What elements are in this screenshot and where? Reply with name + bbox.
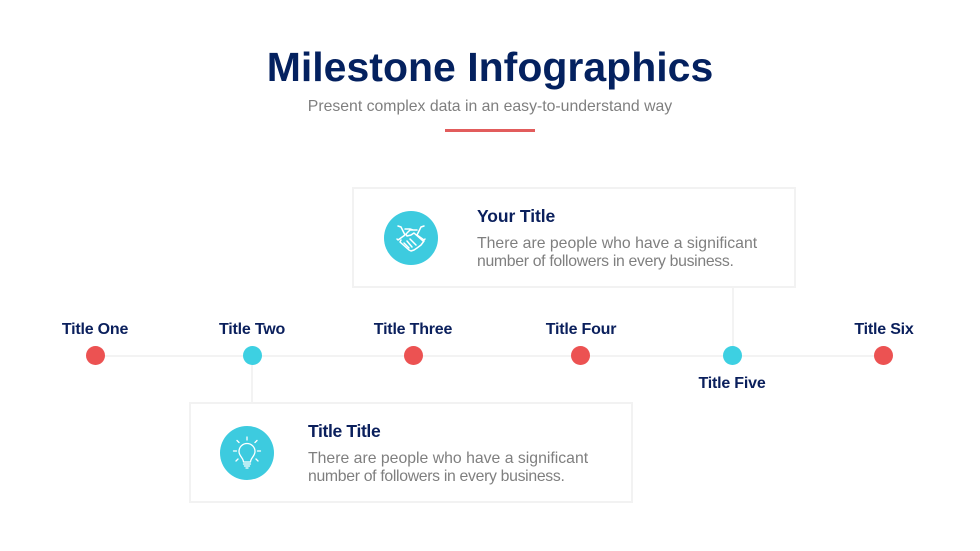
subtitle: Present complex data in an easy-to-understand way [308, 98, 672, 115]
milestone dot: Title Six [874, 346, 893, 365]
card body text: There are people who have a significant [308, 450, 588, 467]
card body text: number of followers in every business. [477, 252, 734, 270]
milestone dot: Title One [86, 346, 105, 365]
title: Milestone Infographics [267, 44, 713, 90]
connector: Title Two to bottom card [251, 356, 253, 404]
connector: top card to Title Five [732, 287, 734, 356]
label: Title Two: Title Two [219, 320, 285, 338]
icon: light bulb [220, 426, 274, 480]
panel: Title Title card [189, 402, 633, 503]
label: Title Three: Title Three [374, 320, 452, 338]
icon: handshake [384, 211, 438, 265]
card body text [308, 450, 588, 484]
label: Title Five: Title Five [698, 374, 766, 392]
milestone dot: Title Five [723, 346, 742, 365]
panel: Your Title card [352, 187, 796, 288]
label: Title Six: Title Six [854, 320, 914, 338]
title underline [445, 129, 535, 132]
card body text: number of followers in every business. [308, 468, 565, 484]
milestone dot: Title Three [404, 346, 423, 365]
milestone dot: Title Four [571, 346, 590, 365]
label: Title One: Title One [62, 320, 128, 338]
card heading: Title Title [308, 421, 380, 441]
label: Title Four: Title Four [546, 320, 616, 338]
card heading: Your Title [477, 206, 555, 226]
milestone dot: Title Two [243, 346, 262, 365]
card body text: There are people who have a significant [477, 235, 757, 252]
card body text [477, 235, 757, 270]
timeline line [95, 355, 883, 357]
